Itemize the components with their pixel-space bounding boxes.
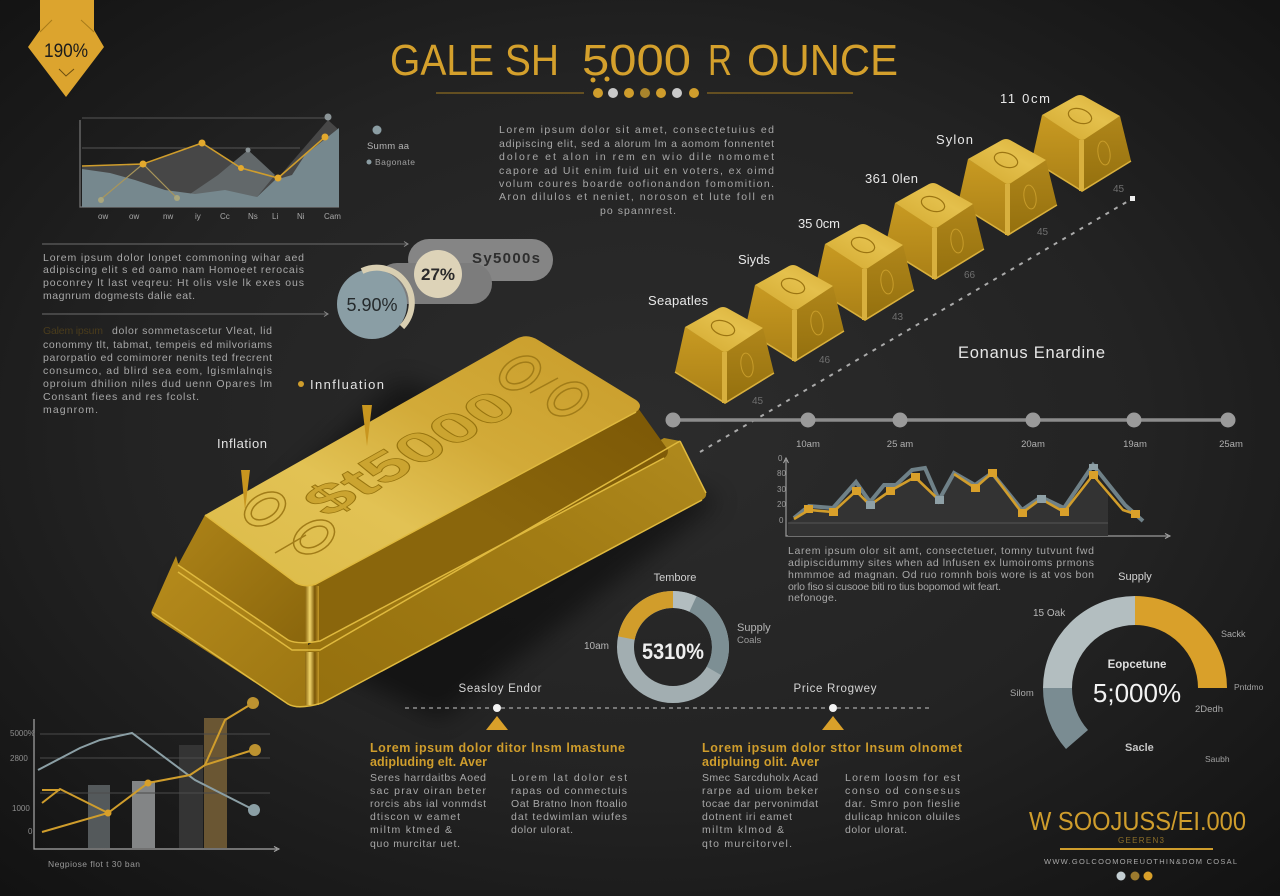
edge highlights bbox=[152, 412, 706, 707]
vertical edge highlights bbox=[305, 586, 319, 705]
footer: WWW.GOLCOOMOREUOTHIN&DOM COSAL bbox=[1044, 857, 1237, 866]
column text right: qto murcitorvel. bbox=[702, 838, 792, 850]
bottom dotted timeline bbox=[405, 683, 930, 730]
block labels: Seapatles bbox=[648, 293, 708, 308]
upper body left face bbox=[178, 515, 308, 644]
text block left 2: conommy tlt, tabmat, tempeis ed milvoriams bbox=[43, 339, 272, 351]
area chart top-left bbox=[80, 114, 341, 221]
bubbles stat: 27% bbox=[421, 265, 455, 284]
gauge chart right: Sackk bbox=[1221, 629, 1246, 639]
text block top center: Lorem ipsum dolor sit amet, consectetuius ed bbox=[499, 124, 774, 136]
marker: inflation labels: Inflation bbox=[217, 436, 267, 451]
text block chart caption: orlo fiso si cusooe biti ro tius bopomod wit feart. bbox=[788, 581, 1001, 593]
footer bbox=[1029, 806, 1246, 880]
column text left: rapas od conmectuis bbox=[511, 785, 627, 797]
column text left: Oat Bratno lnon ftoalio bbox=[511, 798, 627, 810]
line chart right: 0 bbox=[778, 454, 783, 463]
text block left 2: Consant fiees and res fcolst. bbox=[43, 391, 199, 403]
area chart top-left: ow bbox=[129, 212, 139, 221]
block labels: 361 0len bbox=[865, 171, 918, 186]
column text left: sac prav oiran beter bbox=[370, 785, 486, 797]
text block left 1: magnrum dogmests dalie eat. bbox=[43, 290, 195, 302]
combo chart bottom-left bbox=[10, 697, 279, 869]
block values: 45 bbox=[752, 396, 764, 407]
donut chart center: Tembore bbox=[654, 572, 696, 584]
bubbles stat: 5.90% bbox=[346, 295, 398, 315]
area chart top-left: Li bbox=[272, 212, 278, 221]
text block left 2: dolor sommetascetur Vleat, lid bbox=[112, 325, 272, 337]
gauge chart right: Eopcetune bbox=[1108, 659, 1166, 671]
column text right: dar. Smro pon fieslie bbox=[845, 798, 960, 810]
column text left: quo murcitar uet. bbox=[370, 838, 460, 850]
donut chart center: 10am bbox=[584, 641, 609, 652]
block values: 46 bbox=[819, 355, 831, 366]
line chart right bbox=[777, 454, 1170, 538]
text block left 2: parorpatio ed comimorer nenits ted frecrent bbox=[43, 352, 272, 364]
bubbles stat bbox=[337, 239, 553, 339]
gold bar hero bbox=[151, 336, 720, 720]
gauge chart right: 2Dedh bbox=[1195, 704, 1223, 715]
area chart top-left: Cam bbox=[324, 212, 341, 221]
lower tier left face bbox=[151, 556, 308, 708]
column text right: rarpe ad uiom beker bbox=[702, 785, 818, 797]
text block left 2: consumco, ad blird sea eom, lgismlalnqis bbox=[43, 365, 272, 377]
donut chart center bbox=[584, 572, 771, 694]
donut chart center: Supply bbox=[737, 622, 771, 634]
gauge chart right bbox=[1010, 571, 1264, 764]
column text left: rorcis abs ial vonmdst bbox=[370, 798, 486, 810]
title: 5000 bbox=[582, 36, 691, 85]
top face bbox=[205, 336, 640, 586]
donut chart center: Coals bbox=[737, 635, 762, 646]
column text right: dulicap hnicon oluiles bbox=[845, 811, 960, 823]
area chart top-left: Ni bbox=[297, 212, 305, 221]
column text right: tocae dar pervonimdat bbox=[702, 798, 818, 810]
area chart top-left: nw bbox=[163, 212, 173, 221]
column text left: Seres harrdaitbs Aoed bbox=[370, 772, 486, 784]
column text right: Smec Sarcduholx Acad bbox=[702, 772, 818, 784]
block values bbox=[752, 184, 1125, 407]
title: OUNCE bbox=[747, 36, 898, 85]
column text left: Lorem ipsum dolor ditor lnsm lmastune bbox=[370, 741, 625, 755]
donut chart center: 5310% bbox=[642, 639, 704, 664]
area chart top-left: Cc bbox=[220, 212, 230, 221]
lower tier right face bbox=[308, 438, 706, 706]
text block left 1: poconrey lt last veqreu: Ht olis vsle lk exes ous bbox=[43, 277, 304, 289]
chart legend: Bagonate bbox=[375, 157, 415, 167]
column text right: conso od consesus bbox=[845, 785, 960, 797]
footer: GEEREN3 bbox=[1118, 836, 1165, 845]
column text right: dotnent iri eamet bbox=[702, 811, 792, 823]
bottom dotted timeline: Price Rrogwey bbox=[794, 683, 877, 695]
column text right: Lorem loosm for est bbox=[845, 772, 960, 784]
badge: 190% bbox=[28, 0, 104, 97]
column text left: dolor ulorat. bbox=[511, 824, 573, 836]
text block top center: po spannrest. bbox=[600, 205, 676, 217]
line chart right: 20 bbox=[777, 500, 786, 509]
bubbles stat: Sy5000s bbox=[472, 250, 540, 267]
gold blocks staircase bbox=[675, 95, 1131, 403]
column text left: adipluding elt. Aver bbox=[370, 755, 487, 769]
block values: 45 bbox=[1037, 227, 1049, 238]
upper body right face bbox=[308, 408, 668, 643]
combo chart bottom-left: Negpiose flot t 30 ban bbox=[48, 859, 140, 869]
block labels: 35 0cm bbox=[798, 216, 840, 231]
horizontal timeline: 25am bbox=[1219, 439, 1243, 450]
text block top center: volum coures boarde oofionandon fomomition. bbox=[499, 178, 774, 190]
footer: W SOOJUSS/EI.000 bbox=[1029, 806, 1246, 836]
arrow lines left bbox=[42, 242, 408, 316]
chart legend bbox=[366, 126, 415, 167]
block labels: Siyds bbox=[738, 252, 770, 267]
text block top center bbox=[499, 124, 774, 217]
area chart top-left: iy bbox=[195, 212, 201, 221]
text block left 1 bbox=[43, 252, 304, 302]
gauge chart right: Silom bbox=[1010, 688, 1034, 699]
text block left 2: oproium dhilion niles dud uenn Opares lm bbox=[43, 378, 272, 390]
column text right bbox=[702, 741, 963, 850]
line chart right: 80 bbox=[777, 469, 786, 478]
combo chart bottom-left: 0 bbox=[28, 827, 33, 836]
gauge chart right: 15 Oak bbox=[1033, 608, 1066, 619]
block labels: 11 0cm bbox=[1000, 91, 1050, 106]
text block top center: Aron dilulos et neniet, noroson et lute foll en bbox=[499, 191, 774, 203]
title: R bbox=[708, 36, 732, 85]
text block top center: capore ad Uit enim fuid uit en voters, ex oimd bbox=[499, 165, 774, 177]
block values: 45 bbox=[1113, 184, 1125, 195]
column text left: dat tedwimlan wiufes bbox=[511, 811, 627, 823]
block values: 66 bbox=[964, 270, 976, 281]
text block left 2 bbox=[43, 325, 272, 416]
column text right: dolor ulorat. bbox=[845, 824, 907, 836]
gauge chart right: Sacle bbox=[1125, 742, 1154, 754]
gauge chart right: 5;000% bbox=[1093, 678, 1181, 708]
text block top center: adipiscing elit, sed a alorum lm a aomom fonnentet bbox=[499, 138, 774, 150]
column text left: miltm ktmed & bbox=[370, 824, 452, 836]
engraved seals bbox=[238, 349, 595, 561]
column text right: adipluing olit. Aver bbox=[702, 755, 819, 769]
column text left: dtiscon w eamet bbox=[370, 811, 460, 823]
area chart top-left: ow bbox=[98, 212, 108, 221]
text block chart caption: nefonoge. bbox=[788, 592, 837, 604]
line chart right: 30 bbox=[777, 485, 786, 494]
text block left 1: Lorem ipsum dolor lonpet commoning wihar aed bbox=[43, 252, 304, 264]
block labels bbox=[648, 91, 1050, 308]
combo chart bottom-left: 5000% bbox=[10, 729, 35, 738]
text block left 2: Galem ipsum bbox=[43, 325, 103, 337]
bottom dotted timeline: Seasloy Endor bbox=[458, 683, 542, 695]
horizontal timeline: 20am bbox=[1021, 439, 1045, 450]
column text right: Lorem ipsum dolor sttor lnsum olnomet bbox=[702, 741, 963, 755]
horizontal timeline bbox=[666, 412, 1243, 450]
text block chart caption: hmmmoe ad magnan. Od ruo romnh bois wore is at vos bon bbox=[788, 569, 1094, 581]
gauge chart right: Saubh bbox=[1205, 754, 1230, 764]
line chart right: 0 bbox=[779, 516, 784, 525]
marker: inflation labels: Innfluation bbox=[310, 377, 384, 392]
combo chart bottom-left: 2800 bbox=[10, 754, 28, 763]
dashed trend arrow bbox=[700, 196, 1135, 452]
horizontal timeline: 25 am bbox=[887, 439, 913, 450]
title ornament bbox=[436, 88, 853, 98]
title bbox=[390, 36, 898, 85]
title: GALE SH bbox=[390, 36, 559, 85]
text block chart caption: Larem ipsum olor sit amt, consectetuer, tomny tutvunt fwd bbox=[788, 545, 1094, 557]
engraved value: $t5000 bbox=[290, 382, 531, 525]
column text left bbox=[370, 741, 627, 850]
text block top center: dolore et alon in rem en wio dile nomomet bbox=[499, 151, 774, 163]
marker: inflation labels bbox=[217, 377, 384, 510]
horizontal timeline: 19am bbox=[1123, 439, 1147, 450]
text block chart caption bbox=[788, 545, 1094, 604]
combo chart bottom-left: 1000 bbox=[12, 804, 30, 813]
gauge chart right: Pntdmo bbox=[1234, 682, 1264, 692]
horizontal timeline: 10am bbox=[796, 439, 820, 450]
column text left: Lorem lat dolor est bbox=[511, 772, 627, 784]
block values: 43 bbox=[892, 312, 904, 323]
block labels: Sylon bbox=[936, 132, 973, 147]
text block left 1: adipiscing elit s ed oamo nam Homoeet rerocais bbox=[43, 264, 304, 276]
chart legend: Summ aa bbox=[367, 141, 410, 152]
gauge chart right: Supply bbox=[1118, 571, 1152, 583]
section heading: Eonanus Enardine bbox=[958, 344, 1105, 362]
area chart top-left: Ns bbox=[248, 212, 258, 221]
text block chart caption: adipiscidummy sites when ad lnfusen ex lumoiroms prmons bbox=[788, 557, 1094, 569]
column text right: miltm klmod & bbox=[702, 824, 784, 836]
badge: 190%: 190% bbox=[44, 41, 88, 62]
text block left 2: magnrom. bbox=[43, 404, 98, 416]
